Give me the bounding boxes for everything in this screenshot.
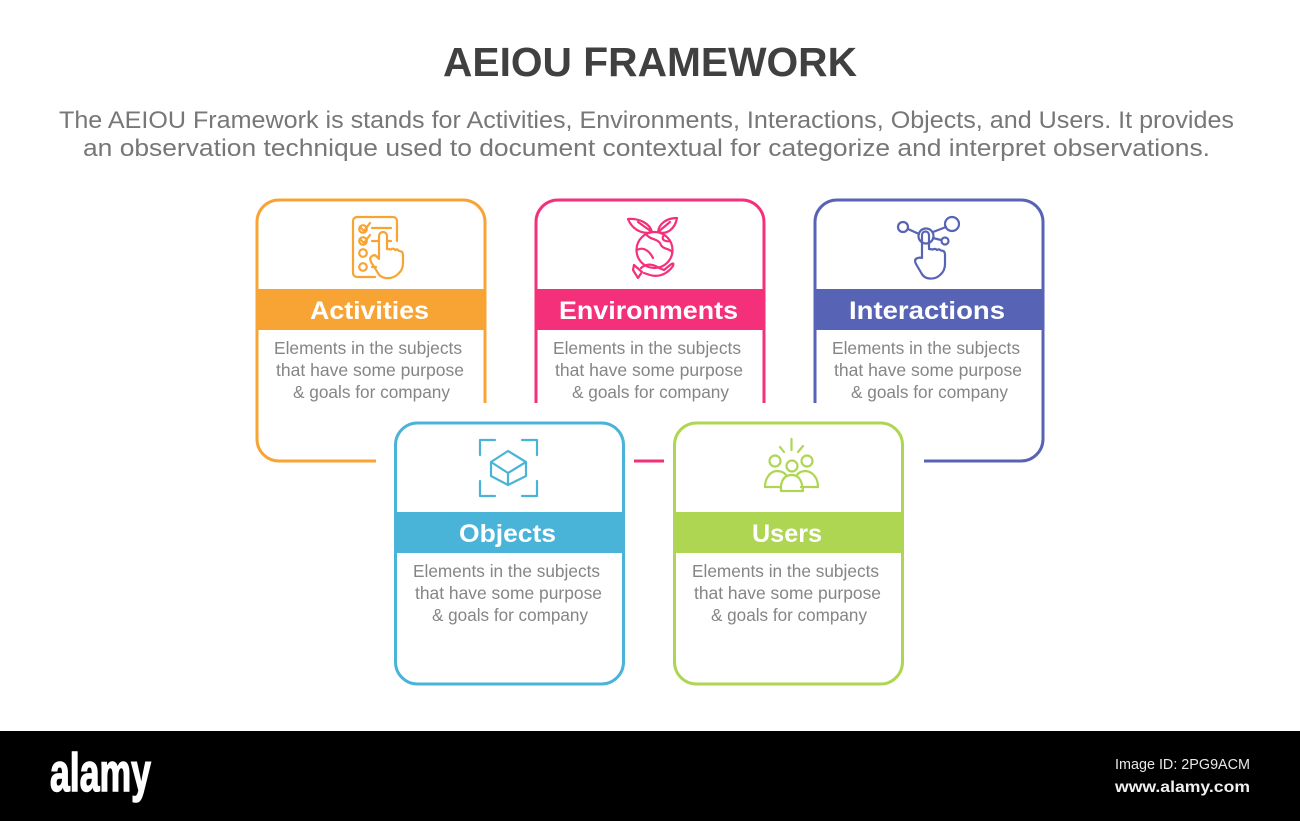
alamy logo wordmark: alamy	[50, 743, 151, 803]
objects description	[413, 561, 602, 625]
activities heading: Activities	[310, 297, 429, 325]
environments outline	[536, 200, 764, 403]
icon: hand touching network nodes	[898, 217, 959, 279]
activities header band	[257, 289, 485, 330]
panel: objects	[396, 423, 624, 684]
connector between objects and users	[634, 460, 664, 462]
activities description: that have some purpose	[276, 360, 464, 380]
subtitle text block: The AEIOU Framework is stands for Activities, Environments, Interactions, Objects, and Users. It provides	[59, 107, 1234, 134]
activities description: & goals for company	[293, 382, 450, 402]
objects description: Elements in the subjects	[413, 561, 600, 581]
icon: group of people	[765, 439, 818, 491]
title: AEIOU FRAMEWORK	[443, 39, 857, 85]
environments description: Elements in the subjects	[553, 338, 741, 358]
interactions outline	[815, 200, 1043, 461]
objects heading: Objects	[459, 520, 556, 548]
watermark footer bar	[0, 731, 1300, 821]
icon: globe with leaves on a hand	[628, 218, 677, 278]
subtitle text block: an observation technique used to document contextual for categorize and interpret observations.	[83, 135, 1210, 162]
users outline	[674, 423, 902, 684]
objects description: that have some purpose	[415, 583, 602, 603]
interactions description: that have some purpose	[834, 360, 1022, 380]
environments description: that have some purpose	[555, 360, 743, 380]
users description: that have some purpose	[694, 583, 881, 603]
activities description	[274, 338, 464, 402]
interactions description: Elements in the subjects	[832, 338, 1020, 358]
interactions header band	[815, 289, 1043, 330]
activities outline	[257, 200, 485, 461]
image id: Image ID: 2PG9ACM	[1115, 757, 1250, 773]
activities description: Elements in the subjects	[274, 338, 462, 358]
website url: www.alamy.com	[1114, 779, 1250, 796]
panel: environments	[536, 200, 764, 403]
panel: interactions	[815, 200, 1043, 461]
users description	[692, 561, 881, 625]
icon: cube in focus frame	[480, 440, 537, 496]
environments header band	[536, 289, 764, 330]
icon: checklist with pointing hand	[353, 217, 403, 278]
subtitle text block	[59, 107, 1234, 162]
panel: activities	[257, 200, 485, 461]
interactions description: & goals for company	[851, 382, 1008, 402]
objects description: & goals for company	[432, 605, 588, 625]
users header band	[674, 512, 902, 553]
environments description	[553, 338, 743, 402]
interactions description	[832, 338, 1022, 402]
objects header band	[396, 512, 624, 553]
environments heading: Environments	[559, 297, 738, 325]
panel: users	[674, 423, 902, 684]
users description: Elements in the subjects	[692, 561, 879, 581]
users description: & goals for company	[711, 605, 867, 625]
environments description: & goals for company	[572, 382, 729, 402]
interactions heading: Interactions	[849, 297, 1005, 325]
users heading: Users	[752, 520, 822, 548]
objects outline	[396, 423, 624, 684]
